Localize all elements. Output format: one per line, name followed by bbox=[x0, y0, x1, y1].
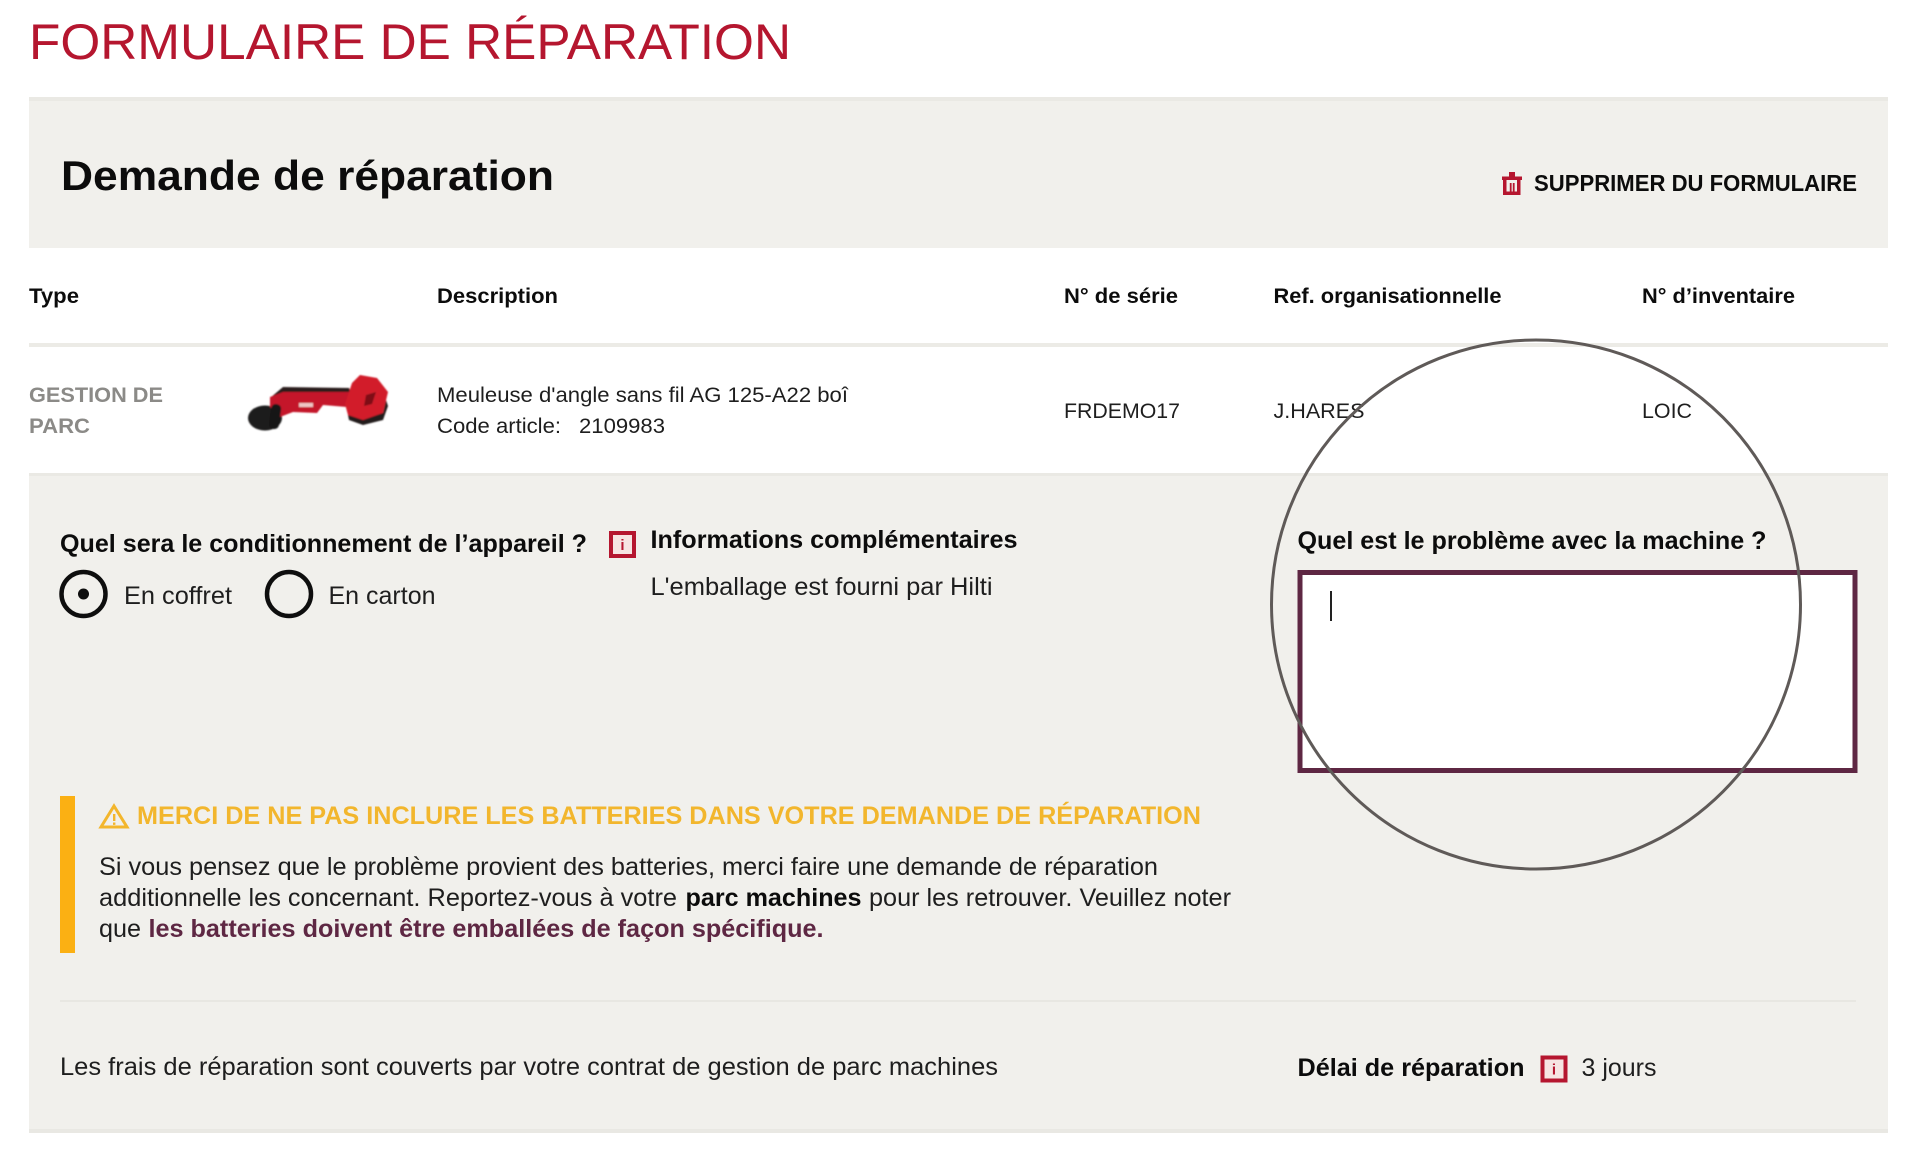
icon: warning triangle bbox=[101, 806, 127, 827]
panel: form header bbox=[29, 97, 1888, 248]
description: 2109983 bbox=[579, 414, 665, 438]
heading: demande de réparation: Demande de réparation bbox=[61, 152, 554, 199]
panel: repair details bbox=[29, 473, 1888, 1133]
warning body text: parc machines bbox=[686, 884, 862, 912]
radio: en carton: En carton bbox=[328, 582, 436, 610]
table header row: Ref. organisationnelle bbox=[1274, 284, 1502, 308]
additional information: Informations complémentaires bbox=[650, 526, 1018, 554]
description: Meuleuse d'angle sans fil AG 125-A22 boî bbox=[437, 383, 849, 407]
table data row bbox=[29, 375, 1692, 438]
serial number: FRDEMO17 bbox=[1064, 399, 1180, 423]
icon: info: i bbox=[1552, 1062, 1556, 1078]
additional information: L'emballage est fourni par Hilti bbox=[650, 573, 992, 601]
icon: info: i bbox=[620, 537, 625, 554]
inventory number: LOIC bbox=[1642, 399, 1692, 423]
text input bbox=[1300, 572, 1855, 770]
question: machine problem: Quel est le problème avec la machine ? bbox=[1298, 527, 1766, 555]
warning body text: pour les retrouver. Veuillez noter bbox=[869, 884, 1231, 912]
warning callout bbox=[60, 796, 1231, 953]
warning body text: Si vous pensez que le problème provient des batteries, merci faire une demande de réparation bbox=[99, 853, 1158, 881]
highlight circle bbox=[1272, 340, 1800, 869]
type label: GESTION DE bbox=[29, 383, 163, 407]
type label bbox=[29, 383, 163, 438]
button: supprimer du formulaire: SUPPRIMER DU FORMULAIRE bbox=[1534, 170, 1857, 196]
table header row bbox=[29, 284, 1888, 347]
type label: PARC bbox=[29, 414, 90, 438]
table header row: N° de série bbox=[1064, 284, 1178, 308]
additional information bbox=[650, 526, 1018, 601]
radio: en carton bbox=[267, 572, 436, 616]
table header row: Type bbox=[29, 284, 79, 308]
radio: en coffret bbox=[62, 572, 232, 616]
icon: info bbox=[611, 533, 634, 556]
warning body text: que bbox=[99, 915, 141, 943]
repair time: 3 jours bbox=[1582, 1054, 1656, 1082]
table header row: N° d’inventaire bbox=[1642, 284, 1795, 308]
repair time: Délai de réparation bbox=[1298, 1054, 1524, 1082]
icon: angle grinder bbox=[248, 375, 388, 430]
title: FORMULAIRE DE RÉPARATION bbox=[29, 14, 791, 70]
question: packaging: Quel sera le conditionnement de l’appareil ? bbox=[60, 530, 587, 558]
organisational ref: J.HARES bbox=[1274, 399, 1364, 423]
warning heading: MERCI DE NE PAS INCLURE LES BATTERIES DANS VOTRE DEMANDE DE RÉPARATION bbox=[137, 801, 1201, 830]
description: Code article: bbox=[437, 414, 561, 438]
description bbox=[437, 383, 849, 438]
warning body text bbox=[99, 853, 1231, 943]
table header row: Description bbox=[437, 284, 558, 308]
radio: en coffret: En coffret bbox=[124, 582, 232, 610]
repair costs note: Les frais de réparation sont couverts par votre contrat de gestion de parc machines bbox=[60, 1053, 998, 1081]
warning body text: les batteries doivent être emballées de façon spécifique. bbox=[148, 915, 824, 943]
icon: trash bbox=[1502, 172, 1522, 195]
icon: info bbox=[1542, 1058, 1566, 1080]
warning body text: additionnelle les concernant. Reportez-vous à votre bbox=[99, 884, 677, 912]
repair time bbox=[1298, 1054, 1656, 1082]
